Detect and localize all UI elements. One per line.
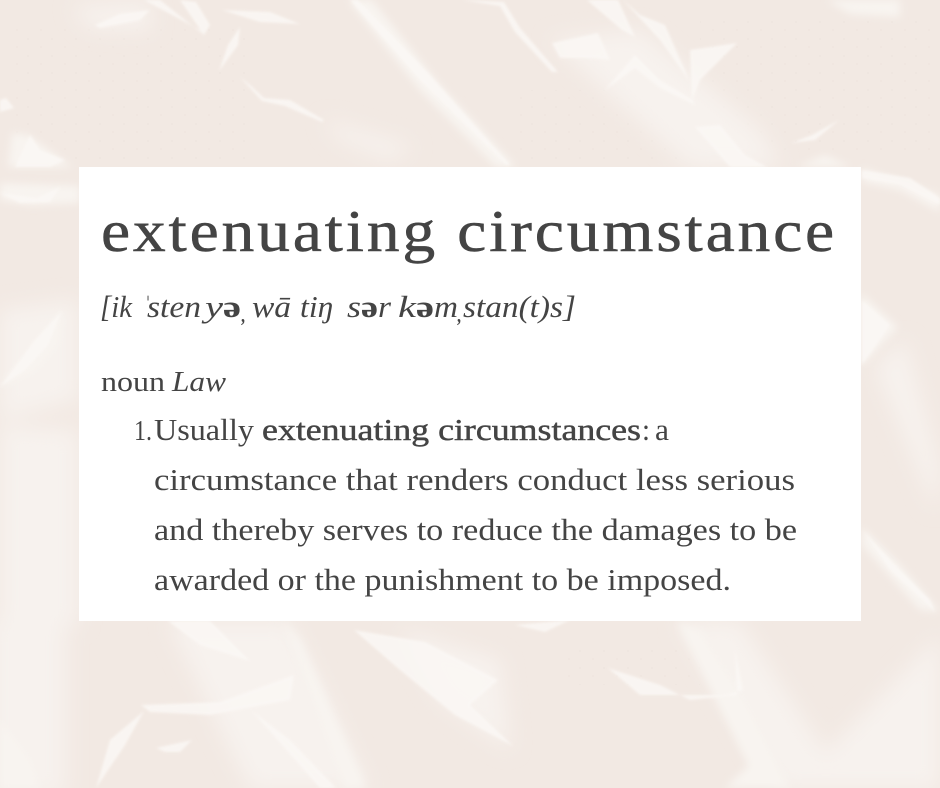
text: part of speech: Law (171, 366, 227, 398)
text: pronunciation: r (378, 289, 392, 324)
text: definition: and thereby serves to reduce the damages to be (154, 512, 797, 547)
text: pronunciation (100, 289, 576, 327)
text: pronunciation: k (398, 289, 418, 324)
panel: definition card (79, 167, 861, 621)
text: definition: extenuating circumstances (262, 412, 641, 447)
text: pronunciation: ˈ (144, 289, 150, 324)
text: pronunciation: ə (416, 289, 434, 324)
text: definition: circumstance that renders conduct less serious (154, 462, 795, 497)
text: pronunciation: ə (223, 289, 241, 324)
text: pronunciation: s (347, 289, 361, 324)
text: definition: awarded or the punishment to be imposed. (154, 562, 731, 597)
text: pronunciation: sten (147, 289, 201, 324)
text: definition: : (642, 412, 650, 447)
text: pronunciation: ə (361, 289, 378, 324)
text: pronunciation: , (457, 305, 461, 327)
text: part of speech (101, 366, 227, 398)
text: pronunciation: , (241, 305, 245, 327)
text: pronunciation: y (201, 289, 223, 324)
text: pronunciation: m (434, 289, 458, 324)
text: definition: Usually (154, 412, 255, 447)
text: definition number: 1. (134, 415, 152, 447)
text: pronunciation: [ik (100, 289, 133, 324)
text: pronunciation: wā (252, 289, 291, 324)
heading: term: extenuating circumstance (101, 198, 837, 264)
text: pronunciation: tiŋ (300, 289, 333, 324)
text: part of speech: noun (101, 366, 166, 398)
text: definition (154, 412, 797, 597)
text: pronunciation: stan(t)s] (463, 289, 576, 324)
text: definition: a (655, 412, 669, 447)
